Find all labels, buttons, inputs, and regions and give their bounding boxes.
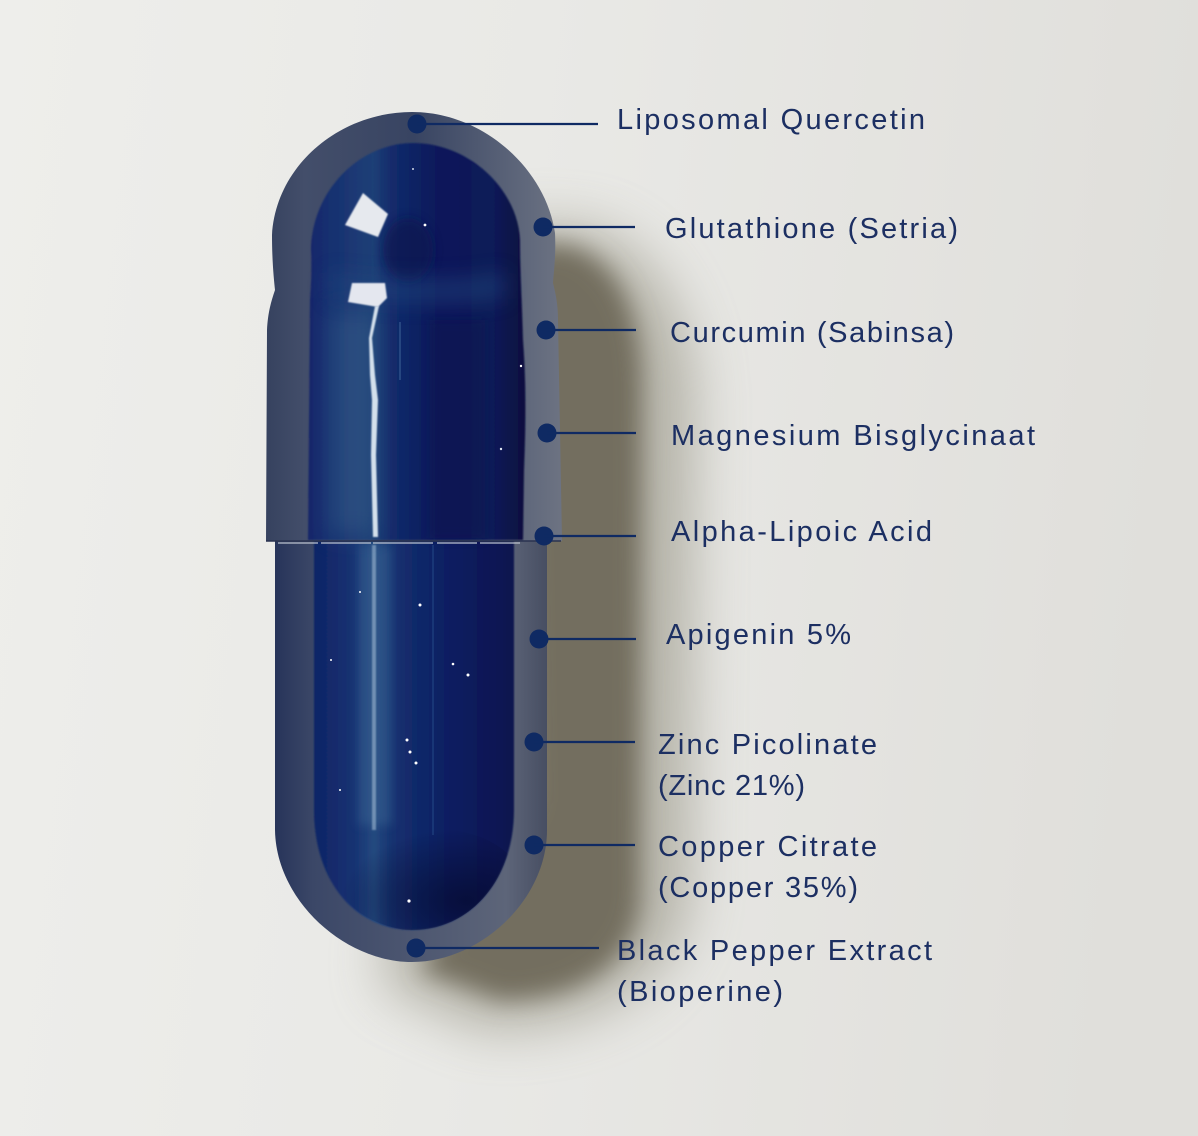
callout: Copper Citrate: (Copper 35%)	[658, 872, 858, 904]
cap highlights	[330, 168, 522, 537]
callout: Copper Citrate	[524, 831, 877, 904]
callout: Magnesium: Magnesium Bisglycinaat	[671, 420, 1035, 452]
callout: Curcumin	[536, 317, 954, 349]
cap rim	[266, 540, 561, 542]
callout: Black Pepper Extract	[406, 935, 932, 1008]
callout: Zinc Picolinate: Zinc Picolinate	[658, 729, 877, 761]
lower shading	[360, 845, 508, 930]
capsule	[266, 112, 562, 962]
callout: Liposomal Quercetin	[408, 104, 925, 136]
callout: Liposomal Quercetin: Liposomal Quercetin	[617, 104, 925, 136]
capsule cap inner fill	[308, 143, 525, 540]
callout: Black Pepper Extract: (Bioperine)	[617, 976, 783, 1008]
callout: Apigenin: Apigenin 5%	[666, 619, 851, 651]
callout: Zinc Picolinate	[524, 729, 877, 802]
callout: Alpha-Lipoic Acid: Alpha-Lipoic Acid	[671, 516, 932, 548]
cap dark spot	[383, 218, 433, 282]
callout: Zinc Picolinate: (Zinc 21%)	[658, 770, 805, 802]
capsule cap shell	[266, 112, 562, 541]
callout: Black Pepper Extract: Black Pepper Extract	[617, 935, 932, 967]
callout: Apigenin	[530, 619, 851, 651]
lower body specks	[330, 591, 470, 903]
callout: Alpha-Lipoic Acid	[534, 516, 932, 548]
lower highlight	[358, 545, 433, 835]
callout: Glutathione: Glutathione (Setria)	[665, 213, 958, 245]
capsule infographic	[266, 0, 1198, 1136]
callout: Glutathione	[534, 213, 958, 245]
callout: Curcumin: Curcumin (Sabinsa)	[670, 317, 954, 349]
capsule lower body shell	[275, 538, 547, 962]
capsule lower body inner fill	[314, 540, 514, 930]
cap reflection band	[330, 272, 505, 302]
callout: Copper Citrate: Copper Citrate	[658, 831, 877, 863]
cap dark band	[430, 320, 485, 538]
capsule shadow	[380, 225, 695, 1030]
